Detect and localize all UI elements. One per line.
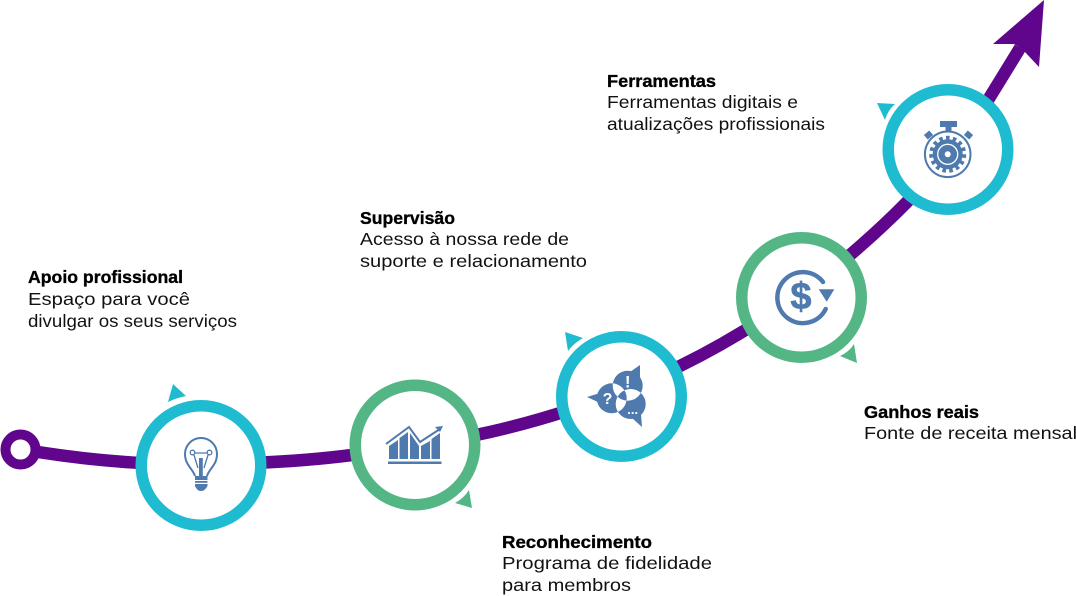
- icon: three speech bubbles: [587, 365, 646, 427]
- ring 2: [355, 385, 475, 505]
- ring 4: [742, 238, 861, 357]
- text block: ferramentas: atualizações profissionais: [607, 114, 825, 134]
- pointer triangle 2: [455, 490, 472, 508]
- text block: apoio profissional: Espaço para você: [28, 289, 190, 309]
- growth path line: [38, 48, 1020, 464]
- text block: ganhos reais: [864, 402, 1076, 443]
- icon: three speech bubbles: ?: [603, 391, 612, 408]
- text block: ganhos reais: Fonte de receita mensal: [864, 423, 1076, 443]
- text block: ferramentas: Ferramentas digitais e: [607, 92, 798, 112]
- text block: apoio profissional: Apoio profissional: [28, 267, 183, 287]
- arrow head: [993, 0, 1044, 67]
- start ring: [6, 434, 36, 464]
- icon: three speech bubbles: ...: [627, 402, 638, 417]
- step 4: ganhos reais: [742, 238, 861, 363]
- text block: reconhecimento: Reconhecimento: [502, 532, 652, 552]
- text block: supervisão: [360, 208, 587, 271]
- icon: dollar with circular arrow: $: [790, 276, 812, 318]
- text block: apoio profissional: divulgar os seus serviços: [28, 311, 237, 331]
- step 2: reconhecimento: [355, 385, 475, 508]
- ring 5: [888, 90, 1008, 209]
- ring 1: [141, 406, 261, 525]
- step 1: apoio profissional: [141, 384, 261, 525]
- icon: bar chart with arrow: [386, 426, 443, 464]
- text block: ganhos reais: Ganhos reais: [864, 402, 979, 422]
- pointer triangle 1: [168, 384, 186, 402]
- step 3: supervisão: [562, 332, 681, 456]
- pointer triangle 4: [840, 344, 857, 363]
- text block: supervisão: suporte e relacionamento: [360, 251, 587, 271]
- text block: reconhecimento: para membros: [502, 575, 631, 595]
- ring 3: [562, 337, 681, 456]
- text block: reconhecimento: Programa de fidelidade: [502, 553, 712, 573]
- pointer triangle 5: [877, 103, 895, 120]
- icon: light bulb: [185, 438, 217, 491]
- step 5: ferramentas: [877, 90, 1008, 209]
- text block: ferramentas: [607, 71, 825, 134]
- icon: three speech bubbles: !: [625, 372, 631, 392]
- text block: supervisão: Acesso à nossa rede de: [360, 229, 569, 249]
- text block: apoio profissional: [28, 267, 237, 331]
- text block: reconhecimento: [502, 532, 712, 595]
- pointer triangle 3: [565, 332, 583, 351]
- text block: ferramentas: Ferramentas: [607, 71, 716, 91]
- icon: stopwatch with gear: [924, 121, 973, 177]
- text block: supervisão: Supervisão: [360, 208, 455, 228]
